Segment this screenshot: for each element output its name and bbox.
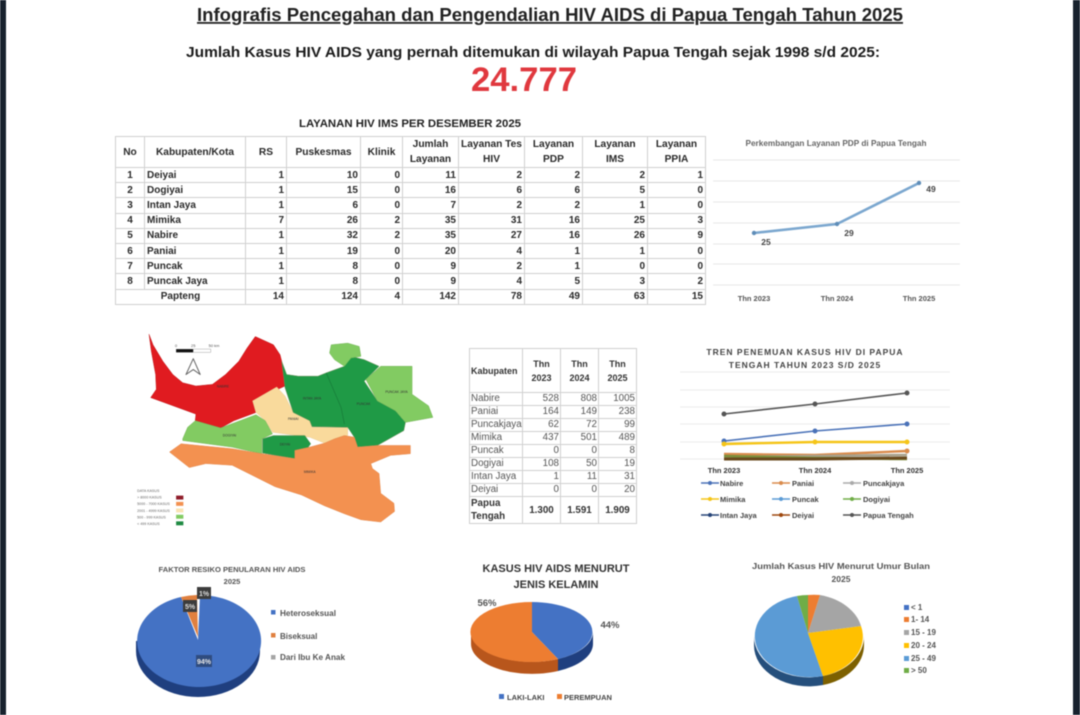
table: cases per district by year: 164 — [543, 406, 559, 417]
map region labels: DOGIYAI — [223, 434, 236, 438]
table: HIV IMS services: 6 — [574, 185, 580, 196]
table: HIV IMS services: Dogiyai — [147, 185, 183, 196]
table: cases per district by year: 108 — [543, 458, 559, 469]
table: HIV IMS services — [114, 136, 706, 306]
data label 1% — [197, 587, 211, 599]
table: cases per district by year: 1.591 — [567, 504, 592, 516]
map scale bar: 0 — [175, 343, 178, 348]
legend — [499, 693, 612, 702]
table: HIV IMS services: 15 — [347, 185, 358, 196]
map legend: > 8000 KASUS — [137, 496, 162, 500]
map scale bar: 50 km — [209, 343, 220, 348]
pie chart: cases by age — [752, 561, 936, 686]
table: HIV IMS services: 1 — [697, 170, 703, 181]
legend: Puncakjaya — [863, 479, 905, 488]
table: HIV IMS services: 1 — [278, 170, 284, 181]
table: HIV IMS services: 1 — [278, 185, 284, 196]
table: HIV IMS services: 2 — [127, 185, 133, 196]
axis labels: Thn 2023 — [708, 466, 740, 475]
right screen edge band — [1073, 0, 1080, 715]
series: Papua Tengah — [722, 391, 909, 416]
legend: LAKI-LAKI — [507, 693, 544, 702]
table: cases per district by year: 0 — [554, 445, 559, 456]
map legend: 500 - 999 KASUS — [137, 515, 166, 519]
table: HIV IMS services: 25 — [634, 215, 645, 226]
legend: Deiyai — [792, 511, 814, 520]
table: HIV IMS services: 2 — [516, 261, 522, 272]
table: cases per district by year: 1 — [554, 471, 559, 482]
map region labels: PANIAI — [288, 417, 299, 421]
table: HIV IMS services: 124 — [341, 291, 358, 302]
table: HIV IMS services: Papteng — [161, 291, 200, 302]
table: HIV IMS services: 49 — [569, 291, 580, 302]
table: cases per district by year: Paniai — [471, 406, 498, 417]
pie chart: risk factors — [136, 565, 346, 697]
table: cases per district by year: 11 — [587, 471, 597, 482]
chart: HIV case trend by district: TENGAH TAHUN 2023 S/D 2025 — [729, 360, 881, 370]
pie chart: cases by age: 2025 — [832, 574, 851, 584]
table: HIV IMS services: Deiyai — [147, 170, 176, 181]
map region labels: NABIRE — [217, 385, 230, 389]
legend: 15 - 19 — [911, 628, 936, 637]
legend: Papua Tengah — [863, 511, 914, 520]
series: Dogiyai — [724, 456, 907, 459]
north arrow — [186, 359, 200, 374]
table: HIV IMS services: Puncak — [147, 261, 183, 272]
table: HIV IMS services: 9 — [450, 276, 456, 287]
pie chart: risk factors: FAKTOR RESIKO PENULARAN HIV AIDS — [158, 565, 306, 574]
table: HIV IMS services: HIV — [483, 154, 500, 165]
table: HIV IMS services: RS — [259, 146, 273, 158]
table: cases per district by year: Nabire — [471, 393, 500, 404]
table: cases per district by year: 0 — [592, 445, 597, 456]
legend: PEREMPUAN — [564, 693, 612, 702]
legend: Paniai — [792, 479, 814, 488]
table: cases per district by year: 1.300 — [529, 504, 554, 516]
pie chart: cases by gender: KASUS HIV AIDS MENURUT — [483, 563, 630, 575]
subtitle: Jumlah Kasus HIV AIDS yang pernah ditemukan di wilayah Papua Tengah sejak 1998 s/d 2025: — [186, 44, 880, 61]
map region: Paniai — [253, 387, 348, 443]
map region: Deiyai — [183, 415, 272, 454]
map region labels: PUNCAK JAYA — [385, 390, 409, 394]
table: HIV IMS services: 27 — [511, 230, 522, 241]
table: cases per district by year: 0 — [592, 484, 597, 495]
table: HIV IMS services: Intan Jaya — [147, 200, 196, 211]
table: cases per district by year — [468, 348, 638, 524]
table: HIV IMS services: 1 — [574, 261, 580, 272]
table: cases per district by year: Intan Jaya — [471, 471, 516, 482]
table: HIV IMS services: Puncak Jaya — [147, 276, 208, 287]
map region: Dogiyai — [263, 436, 311, 459]
data label 94%: 94% — [197, 659, 212, 666]
table: HIV IMS services: 0 — [697, 246, 703, 257]
table: cases per district by year: 72 — [586, 419, 597, 430]
table: HIV IMS services: 4 — [127, 215, 133, 226]
table: HIV IMS services: 7 — [450, 200, 456, 211]
table: HIV IMS services: 2 — [639, 170, 645, 181]
map region labels: DEIYAI — [280, 442, 290, 446]
series: Mimika — [722, 440, 909, 446]
table: HIV IMS services: 9 — [450, 261, 456, 272]
table: HIV IMS services: 1 — [639, 200, 645, 211]
table: HIV IMS services: 1 — [278, 246, 284, 257]
legend: Nabire — [720, 479, 743, 488]
chart: HIV case trend by district: TREN PENEMUAN KASUS HIV DI PAPUA — [706, 347, 904, 357]
table: HIV IMS services: 2 — [394, 215, 400, 226]
table: HIV IMS services: Layanan — [656, 139, 697, 150]
table: HIV IMS services: 15 — [692, 291, 703, 302]
map scale bar — [175, 343, 220, 352]
table: HIV IMS services: 4 — [394, 291, 400, 302]
legend — [271, 609, 346, 662]
legend: Puncak — [792, 495, 820, 504]
table: cases per district by year: Papua — [471, 498, 500, 509]
table: HIV IMS services: 2 — [574, 170, 580, 181]
table: HIV IMS services: 0 — [394, 200, 400, 211]
table: HIV IMS services: 142 — [439, 291, 456, 302]
table: HIV IMS services: 2 — [516, 170, 522, 181]
table: cases per district by year: 50 — [586, 458, 597, 469]
data label 5% — [183, 600, 197, 612]
legend: Heteroseksual — [280, 609, 336, 618]
service table heading: LAYANAN HIV IMS PER DESEMBER 2025 — [299, 118, 521, 130]
table: HIV IMS services: 1 — [278, 230, 284, 241]
table: HIV IMS services: 2 — [697, 276, 703, 287]
axis labels: Thn 2024 — [799, 466, 832, 475]
axis labels — [708, 466, 923, 475]
legend — [701, 479, 914, 520]
table: HIV IMS services: 5 — [574, 276, 580, 287]
map legend: 2001 - 4999 KASUS — [137, 509, 170, 513]
legend: Intan Jaya — [720, 511, 758, 520]
chart: PDP service trend: Perkembangan Layanan PDP di Papua Tengah — [746, 138, 926, 148]
chart: PDP service trend: 25 — [761, 237, 771, 247]
series: Deiyai, Puncak and Intan Jaya — [724, 458, 907, 459]
table: HIV IMS services: 3 — [697, 215, 703, 226]
table: cases per district by year: 8 — [630, 445, 635, 456]
map legend: 5000 - 7000 KASUS — [137, 502, 170, 506]
table: HIV IMS services: 0 — [639, 261, 645, 272]
table: cases per district by year: 62 — [548, 419, 559, 430]
table: cases per district by year: 2025 — [607, 372, 628, 382]
map legend: DATA KASUS — [137, 489, 160, 493]
table: cases per district by year: Puncak — [471, 445, 504, 456]
table: HIV IMS services: 1 — [278, 200, 284, 211]
title: Infografis Pencegahan dan Pengendalian HIV AIDS di Papua Tengah Tahun 2025 — [197, 5, 903, 25]
table: HIV IMS services: 31 — [511, 215, 522, 226]
map of Papua Tengah — [137, 334, 433, 526]
table: cases per district by year: Thn — [571, 358, 588, 368]
table: HIV IMS services: Jumlah — [413, 139, 448, 150]
table: HIV IMS services: Layanan — [533, 139, 574, 150]
label 44%: 44% — [600, 620, 620, 631]
table: HIV IMS services: 7 — [278, 215, 284, 226]
table: cases per district by year: Kabupaten — [471, 366, 518, 376]
table: HIV IMS services: 0 — [394, 276, 400, 287]
table: HIV IMS services: 5 — [127, 230, 133, 241]
pie chart: cases by age: Jumlah Kasus HIV Menurut Umur Bulan — [752, 561, 930, 571]
map region labels: PUNCAK — [357, 402, 371, 406]
table: HIV IMS services: Paniai — [147, 246, 176, 257]
label 56%: 56% — [477, 598, 497, 609]
table: cases per district by year: 149 — [581, 406, 597, 417]
table: cases per district by year: 437 — [543, 432, 559, 443]
legend — [904, 603, 936, 675]
legend: < 1 — [911, 603, 923, 612]
legend: 25 - 49 — [911, 654, 936, 663]
left screen edge band — [0, 0, 6, 715]
table: HIV IMS services: 0 — [697, 185, 703, 196]
map region: Puncak Jaya — [366, 366, 433, 422]
series: Puncak Jaya — [724, 455, 907, 457]
table: HIV IMS services: 0 — [394, 246, 400, 257]
table: HIV IMS services: Puskesmas — [295, 146, 352, 158]
table: HIV IMS services: 2 — [574, 200, 580, 211]
table: HIV IMS services: 0 — [697, 261, 703, 272]
map region labels: INTAN JAYA — [303, 397, 322, 401]
chart: PDP service trend: Thn 2025 — [903, 294, 935, 303]
table: cases per district by year: Mimika — [471, 432, 502, 443]
table: HIV IMS services: 19 — [347, 246, 358, 257]
legend: Biseksual — [280, 632, 317, 641]
series: Nabire — [722, 422, 909, 443]
table: HIV IMS services: 6 — [352, 200, 358, 211]
table: HIV IMS services: Layanan — [410, 154, 451, 165]
pie chart: cases by gender: JENIS KELAMIN — [514, 579, 599, 591]
table: cases per district by year: Puncakjaya — [471, 419, 522, 430]
map region labels: MIMIKA — [304, 470, 316, 474]
table: HIV IMS services: 11 — [445, 170, 456, 181]
table: HIV IMS services: PDP — [543, 154, 564, 165]
table: cases per district by year: 528 — [543, 393, 559, 404]
table: HIV IMS services: 0 — [394, 185, 400, 196]
map legend: < 499 KASUS — [137, 522, 160, 526]
table: HIV IMS services: Layanan Tes — [461, 139, 522, 150]
table: cases per district by year: Deiyai — [471, 484, 498, 495]
chart: PDP service trend: 49 — [926, 184, 936, 194]
table: HIV IMS services: 32 — [347, 230, 358, 241]
map region: Intan Jaya and Puncak — [282, 356, 405, 447]
table: cases per district by year: 20 — [624, 484, 635, 495]
map scale bar: 25 — [191, 343, 196, 348]
table: HIV IMS services: 6 — [127, 246, 133, 257]
table: cases per district by year: 1005 — [613, 393, 635, 404]
table: cases per district by year: 31 — [624, 471, 635, 482]
chart: PDP service trend: Thn 2023 — [738, 294, 770, 303]
table: HIV IMS services: 78 — [511, 291, 522, 302]
table: HIV IMS services: 26 — [634, 230, 645, 241]
table: HIV IMS services: 16 — [569, 215, 580, 226]
map region labels — [217, 385, 409, 474]
table: HIV IMS services: 1 — [127, 170, 133, 181]
table: HIV IMS services: Layanan — [594, 139, 636, 150]
table: HIV IMS services: 20 — [445, 246, 456, 257]
table: HIV IMS services: 2 — [394, 230, 400, 241]
table: HIV IMS services: 1 — [278, 261, 284, 272]
table: HIV IMS services: 2 — [516, 200, 522, 211]
table: HIV IMS services: 0 — [394, 170, 400, 181]
table: HIV IMS services: 8 — [352, 261, 358, 272]
table: HIV IMS services: 1 — [639, 246, 645, 257]
table: HIV IMS services: 3 — [639, 276, 645, 287]
data label 5%: 5% — [185, 604, 196, 611]
legend: 20 - 24 — [911, 641, 936, 650]
legend: Dogiyai — [863, 495, 890, 504]
series: Paniai — [724, 449, 909, 455]
table: cases per district by year: 1.909 — [605, 504, 630, 516]
table: HIV IMS services: 8 — [352, 276, 358, 287]
chart: PDP service trend — [713, 138, 960, 303]
table: HIV IMS services: 0 — [697, 200, 703, 211]
table: HIV IMS services: 26 — [347, 215, 358, 226]
table: HIV IMS services: Mimika — [147, 215, 181, 226]
chart: PDP service trend: 29 — [844, 228, 854, 238]
table: cases per district by year: Thn — [533, 358, 550, 368]
table: HIV IMS services: 4 — [516, 246, 522, 257]
table: HIV IMS services: 16 — [445, 185, 456, 196]
map region: Puncak boundary — [326, 373, 344, 424]
table: cases per district by year: Tengah — [471, 511, 505, 522]
map region: Nabire — [149, 334, 285, 428]
table: HIV IMS services: 35 — [445, 230, 456, 241]
table: HIV IMS services: 7 — [127, 261, 133, 272]
map region: Dogiyai north — [330, 343, 361, 366]
table: HIV IMS services: IMS — [606, 154, 624, 165]
legend: > 50 — [911, 666, 927, 675]
table: HIV IMS services: 16 — [569, 230, 580, 241]
legend: Dari Ibu Ke Anak — [280, 653, 346, 662]
table: HIV IMS services: 5 — [639, 185, 645, 196]
table: HIV IMS services: 6 — [516, 185, 522, 196]
table: cases per district by year: 0 — [554, 484, 559, 495]
legend: 1- 14 — [911, 615, 930, 624]
table: cases per district by year: Thn — [609, 358, 626, 368]
table: HIV IMS services: 35 — [445, 215, 456, 226]
map legend — [137, 489, 183, 526]
table: cases per district by year: 501 — [581, 432, 597, 443]
table: HIV IMS services: Klinik — [368, 146, 395, 158]
data label 1%: 1% — [199, 591, 210, 598]
table: HIV IMS services: 0 — [394, 261, 400, 272]
chart: PDP service trend: Thn 2024 — [821, 294, 854, 303]
map region: Mimika — [170, 436, 410, 522]
table: HIV IMS services: PPIA — [665, 154, 688, 165]
pie chart: cases by gender — [470, 563, 630, 702]
chart: HIV case trend by district — [680, 347, 950, 520]
table: cases per district by year: 19 — [624, 458, 635, 469]
table: HIV IMS services: 10 — [347, 170, 358, 181]
table: HIV IMS services: No — [123, 146, 137, 158]
table: cases per district by year: 808 — [581, 393, 597, 404]
pie chart: risk factors: 2025 — [224, 577, 240, 586]
total case number: 24.777 — [471, 61, 577, 99]
table: HIV IMS services: Nabire — [147, 230, 178, 241]
axis labels: Thn 2025 — [891, 466, 923, 475]
table: cases per district by year: 99 — [624, 419, 635, 430]
table: HIV IMS services: 1 — [574, 246, 580, 257]
table: HIV IMS services: 63 — [634, 291, 645, 302]
table: HIV IMS services: 8 — [127, 276, 133, 287]
data label 94% — [196, 655, 212, 667]
table: cases per district by year: 238 — [619, 406, 635, 417]
table: HIV IMS services: 4 — [516, 276, 522, 287]
legend: Mimika — [720, 495, 746, 504]
table: cases per district by year: 2023 — [531, 372, 552, 382]
table: cases per district by year: Dogiyai — [471, 458, 504, 469]
table: HIV IMS services: 3 — [127, 200, 133, 211]
table: HIV IMS services: 14 — [273, 291, 284, 302]
table: cases per district by year: 489 — [619, 432, 635, 443]
table: HIV IMS services: 9 — [697, 230, 703, 241]
table: HIV IMS services: 1 — [278, 276, 284, 287]
table: cases per district by year: 2024 — [569, 372, 590, 382]
table: HIV IMS services: Kabupaten/Kota — [156, 146, 234, 158]
